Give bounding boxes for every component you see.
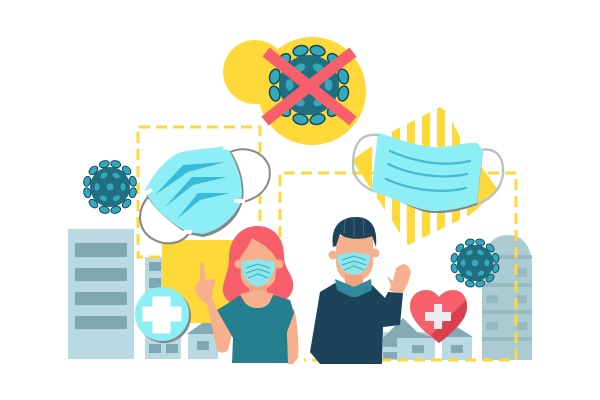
building: tall left tower	[68, 229, 134, 359]
icon: left virus	[83, 160, 137, 214]
man mask	[337, 252, 370, 275]
dashed frame: left	[138, 127, 260, 257]
man hand	[387, 264, 411, 293]
icon: crossed-out virus	[265, 44, 353, 126]
man sweater	[310, 283, 403, 364]
houses: right houses behind heart	[383, 318, 473, 360]
woman arm and hand	[195, 263, 232, 353]
icon: right virus	[450, 238, 500, 288]
surgical mask: left	[140, 146, 270, 243]
house: left small house	[187, 323, 222, 359]
building: rounded right tower	[482, 235, 532, 360]
man collar	[335, 279, 372, 297]
building: small tower behind plus icon	[145, 257, 181, 359]
yellow square behind woman	[162, 240, 252, 323]
person: woman in mask	[195, 226, 298, 364]
icon: medical plus badge	[135, 287, 191, 343]
dashed frame: right	[280, 173, 516, 360]
striped yellow diamond	[350, 105, 498, 250]
yellow blobs behind top virus	[223, 37, 366, 145]
woman shirt	[217, 295, 294, 363]
icon: heart with plus	[410, 290, 467, 343]
person: man in mask	[310, 217, 411, 364]
woman mask	[241, 259, 275, 287]
surgical mask: right	[353, 133, 503, 213]
